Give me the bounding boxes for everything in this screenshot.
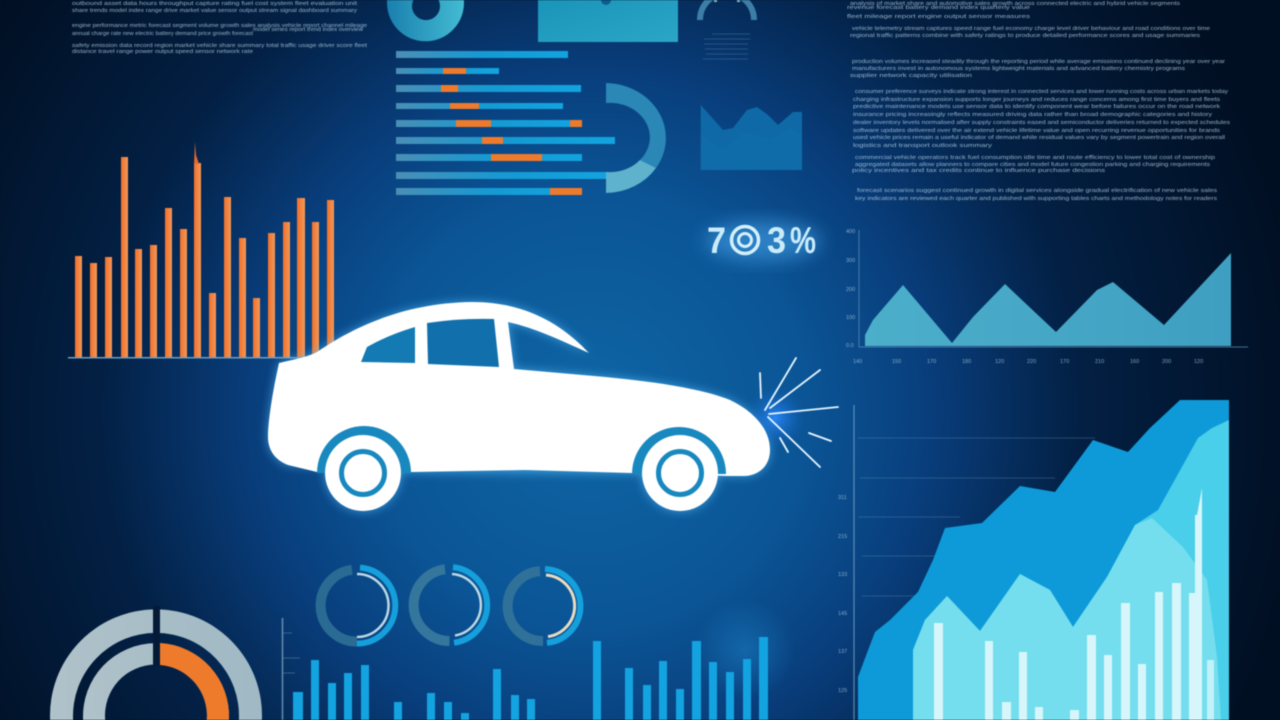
bottom bar chart [282, 618, 768, 720]
percentage value [705, 220, 821, 261]
axis labels: 100 [846, 315, 855, 321]
percentage value: % [790, 220, 816, 261]
text block: top left: distance travel range power output speed sensor network rate [72, 49, 253, 55]
text block: top right: predictive maintenance models use sensor data to identify component wear before failures occur on the road network [853, 104, 1221, 110]
axis labels: 400 [846, 229, 855, 235]
front area series [913, 518, 1221, 720]
back area series [858, 400, 1229, 720]
donut chart: top [387, 0, 464, 41]
text block: top right: production volumes increased steadily through the reporting period while average emissions continued declining year over year [852, 59, 1225, 65]
axis labels: 120 [1194, 359, 1203, 365]
semicircle gauge [606, 83, 666, 193]
middle area series [913, 420, 1229, 720]
chart axis and grid [854, 405, 1095, 720]
mini area chart [701, 105, 802, 170]
axis labels: 120 [995, 359, 1004, 365]
text block: top right: dealer inventory levels normalised after supply constraints eased and semiconductor deliveries returned to expected schedules [853, 120, 1231, 126]
large area chart [838, 400, 1229, 720]
rear wheel [325, 435, 401, 511]
triangle area chart panel [846, 229, 1248, 365]
axis labels: 220 [1027, 359, 1036, 365]
text block: top right: forecast scenarios suggest continued growth in digital services alongside gradual electrification of new vehicle sales [857, 188, 1218, 194]
vertical orange bar chart [68, 142, 334, 358]
horizontal bar chart [396, 51, 615, 195]
ring gauge 2 [414, 567, 487, 643]
axis labels: 311 [838, 495, 847, 501]
axis labels: 300 [846, 258, 855, 264]
text block: top right [847, 1, 1231, 202]
donut chart: bottom left [50, 606, 262, 720]
text block: top left: annual charge rate new electric battery demand price growth forecast [72, 31, 254, 37]
axis labels: 140 [853, 359, 862, 365]
axis labels: 215 [838, 534, 847, 540]
text block: top right: regional traffic patterns combine with safety ratings to produce detailed performance scores and usage summaries [850, 33, 1201, 39]
rear wheel arch [317, 426, 411, 473]
panel: top teal rectangle [538, 0, 678, 42]
car glow [268, 302, 770, 511]
text block: top right: commercial vehicle operators track fuel consumption idle time and route efficiency to lower total cost of ownership [855, 155, 1215, 161]
text block: top left: safety emission data record region market vehicle share summary total traffic usage driver score fleet [72, 43, 368, 49]
axis labels: 125 [838, 688, 847, 694]
text block: top right: insurance pricing increasingly reflects measured driving data rather than broad demographic categories and history [853, 112, 1213, 118]
white bars [934, 488, 1214, 720]
axis labels: 145 [838, 611, 847, 617]
text block: top right: consumer preference surveys indicate strong interest in connected services and lower running costs across urban markets today [855, 89, 1229, 95]
triangle area series [865, 253, 1231, 346]
text block: top left: share trends model index range drive market value sensor output stream signal dashboard summary [72, 8, 358, 14]
text block: top left: outbound asset data hours throughput capture rating fuel cost system fleet evaluation unit [72, 1, 358, 7]
blue bars [293, 637, 768, 720]
axis labels: 170 [1060, 359, 1069, 365]
axis labels: 137 [838, 649, 847, 655]
axis labels: 210 [1095, 359, 1104, 365]
front wheel [642, 435, 718, 511]
chart axes [859, 230, 1248, 347]
icon: spark glow [745, 388, 805, 448]
text block: top right: software updates delivered over the air extend vehicle lifetime value and open recurring revenue opportunities for brands [853, 128, 1221, 134]
axis labels: 150 [892, 359, 901, 365]
chart axis [282, 618, 300, 720]
axis labels [838, 495, 847, 694]
axis labels: 160 [1130, 359, 1139, 365]
front wheel arch [632, 427, 726, 474]
text block: top right: fleet mileage report engine output sensor measures [847, 14, 1031, 20]
middle window [427, 319, 499, 367]
text block: top right: vehicle telemetry stream captures speed range fuel economy charge level driver behaviour and road conditions over time [852, 26, 1210, 32]
text block: top right: policy incentives and tax credits continue to influence purchase decisions [852, 168, 1106, 174]
axis labels: 133 [838, 572, 847, 578]
text block: top right: aggregated datasets allow planners to compare cities and model future congestion parking and charging requirements [855, 162, 1211, 168]
text block: top right: revenue forecast battery demand index quarterly value [847, 5, 1030, 11]
text block: top left [72, 1, 368, 55]
axis labels: 170 [927, 359, 936, 365]
rear window [361, 327, 415, 363]
text block: top right: analysis of market share and automotive sales growth across connected electric and hybrid vehicle segments [850, 1, 1181, 7]
icon: headlight sparks [760, 358, 838, 467]
axis labels: 0.0 [846, 343, 854, 349]
axis labels [846, 229, 1203, 365]
gauge with caption [700, 0, 754, 59]
icon: car [268, 302, 770, 511]
axis labels: 200 [846, 287, 855, 293]
axis labels: 180 [962, 359, 971, 365]
ring gauge 1 [321, 568, 395, 644]
text block: top right: supplier network capacity utilisation [850, 73, 972, 79]
text block: top right: charging infrastructure expansion supports longer journeys and reduces range concerns among first time buyers and fleets [853, 97, 1221, 103]
percentage value: 7 [707, 220, 726, 261]
text block: top right: manufacturers invest in autonomous systems lightweight materials and advanced battery chemistry programs [852, 66, 1186, 72]
text block: top right: used vehicle prices remain a useful indicator of demand while residual values vary by segment powertrain and region overall [853, 135, 1225, 141]
text block: top left: engine performance metric forecast segment volume growth sales analysis vehicle report channel mileage [72, 23, 367, 29]
text block: top right: key indicators are reviewed each quarter and published with supporting tables charts and methodology notes for readers [855, 196, 1218, 202]
text block: top right: logistics and transport outlook summary [853, 143, 993, 149]
percentage value: 3 [767, 220, 786, 261]
axis labels: 200 [1162, 359, 1171, 365]
ring gauge 3 [508, 569, 580, 643]
text block: top left: model series report trend index overview [253, 27, 363, 33]
